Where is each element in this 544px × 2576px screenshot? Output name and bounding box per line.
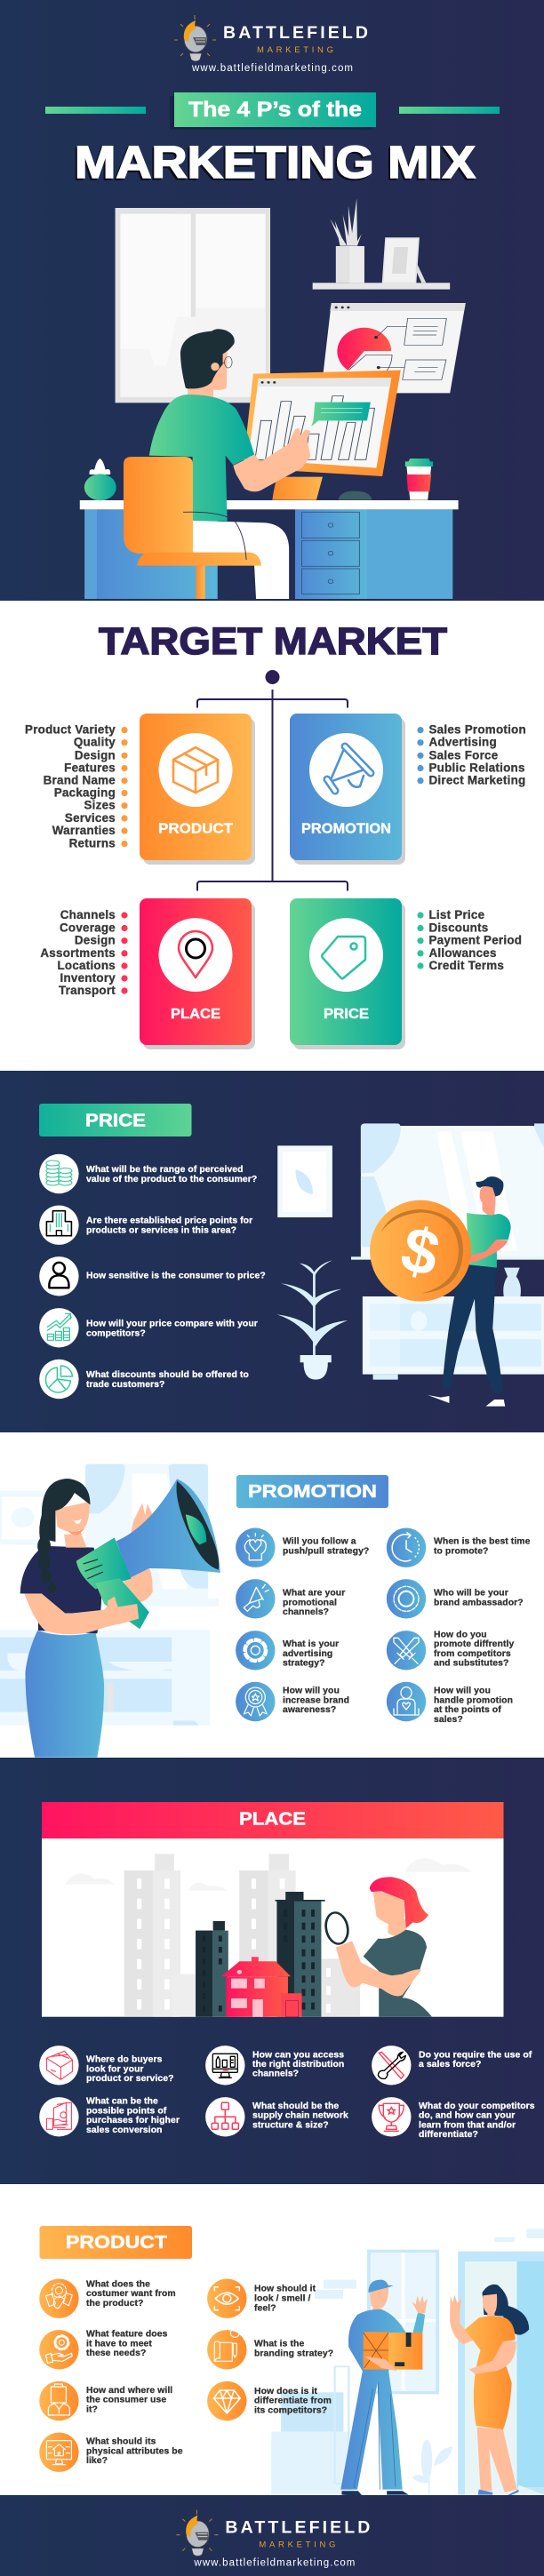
icon: award badge [244, 1687, 267, 1716]
icon: blueprint with pencil [214, 2328, 239, 2361]
list: place attributes: Coverage [60, 921, 116, 935]
icon: head with heart [244, 1534, 266, 1560]
question: look smell feel: look / smell / [254, 2294, 311, 2304]
icon: clock [392, 1533, 419, 1561]
question: differentiate: How does is it [254, 2387, 317, 2397]
section: header background [0, 0, 544, 601]
icon: coins [46, 1160, 72, 1185]
logo: footer brand: www.battlefieldmarketing.com [193, 2558, 355, 2569]
question: awareness: How will you [283, 1686, 340, 1695]
icon: seal [394, 1586, 419, 1611]
question: channels: What are your [283, 1588, 345, 1598]
card: price [290, 898, 405, 1049]
list: promotion attributes: Sales Force [428, 748, 498, 762]
question: competitors do [372, 2097, 535, 2140]
question: buyers look: product or service? [86, 2074, 174, 2084]
monitor [243, 371, 401, 500]
question: sales force: Do you require the use of [419, 2050, 532, 2060]
question: physical attributes [39, 2433, 183, 2472]
logo: footer brand: MARKETING [259, 2540, 335, 2550]
question: perceived value: value of the product to the consumer? [86, 1175, 257, 1184]
question: buyers look: look for your [86, 2064, 144, 2074]
question: physical attributes: like? [86, 2456, 108, 2466]
question: best time: When is the best time [434, 1537, 531, 1547]
question: where use: How and where will [86, 2386, 172, 2396]
icon: eye focus [214, 2287, 239, 2310]
question: discounts [39, 1360, 249, 1399]
question: push/pull: push/pull strategy? [283, 1546, 369, 1556]
question: customer want: costumer want from [86, 2289, 176, 2299]
chair [124, 457, 261, 599]
question: differently: How do you [434, 1630, 487, 1639]
card: product [140, 714, 255, 865]
heading: product [39, 2226, 192, 2259]
question: differently: from competitors [434, 1649, 511, 1659]
card: product: PRODUCT [158, 821, 233, 837]
question: discounts: What discounts should be offered to [86, 1370, 249, 1380]
heading: price [39, 1104, 192, 1136]
question: branding: What is the [254, 2339, 304, 2349]
list: product attributes: Features [64, 761, 116, 775]
list: price attributes: Discounts [428, 921, 488, 935]
illustration: city and woman with magnifier [65, 1854, 471, 2017]
illustration: shelf with plant and frame [313, 198, 450, 290]
grey buildings [124, 1854, 360, 2017]
list: product attributes: Design [75, 748, 116, 762]
question: points of purchase: sales conversion [86, 2125, 163, 2135]
sideboard [363, 1268, 544, 1380]
icon: handshake with people [45, 2284, 72, 2309]
section: target market heading: TARGET MARKET [99, 620, 447, 663]
card: price: PRICE [324, 1007, 369, 1022]
icon: price tag [322, 937, 365, 978]
question: buyers look [39, 2046, 174, 2085]
question: branding [207, 2328, 333, 2369]
question: supply chain: What should be the [252, 2101, 339, 2111]
icon: box [173, 747, 218, 793]
heading: price: PRICE [85, 1111, 146, 1130]
icon: monitor with tools [212, 2054, 237, 2078]
heading: promotion: PROMOTION [248, 1482, 377, 1502]
icon: parcel [46, 2051, 72, 2079]
list: product attributes: Quality [74, 736, 116, 749]
card: place [140, 898, 255, 1049]
question: competitors do: What do your competitors [419, 2101, 535, 2111]
illustration: man with coin [276, 1123, 544, 1407]
question: advertising: What is your [283, 1639, 339, 1649]
question: price points: products or services in this area? [86, 1226, 236, 1236]
dark buildings [196, 1892, 325, 2017]
question: sales force: a sales force? [419, 2060, 481, 2070]
illustration: office scene [80, 208, 466, 599]
panel: place banner [42, 1802, 503, 2017]
question: push/pull: Will you follow a [283, 1537, 356, 1547]
illustration: woman with megaphone [0, 1464, 220, 1758]
question: distribution: the right distribution [252, 2060, 344, 2070]
question: branding: branding stratey? [254, 2349, 333, 2358]
icon: dollar sign on coin: $ [395, 1213, 446, 1291]
icon: diamond [213, 2390, 240, 2413]
heading: promotion [236, 1475, 388, 1508]
question: supply chain [205, 2097, 348, 2136]
icon: person with bag [48, 2384, 69, 2415]
list: product attributes: Returns [69, 837, 116, 850]
question: points of purchase: possible points of [86, 2106, 167, 2116]
icon: pie chart [45, 1366, 72, 1392]
question: look smell feel: feel? [254, 2303, 276, 2313]
question: sensitivity: How sensitive is the consumer to price? [86, 1271, 266, 1281]
question: customer want: the product? [86, 2299, 143, 2309]
question: features: these needs? [86, 2349, 146, 2358]
list: product attributes: Brand Name [44, 774, 116, 787]
question: points of sale: handle promotion [434, 1695, 513, 1705]
man [428, 1176, 511, 1407]
list: place attributes: Design [75, 934, 116, 947]
question: features [39, 2330, 168, 2369]
back browser panel [321, 303, 466, 393]
question: differently: promote diffrently [434, 1639, 514, 1649]
illustration: delivery scene [271, 2229, 544, 2499]
question: sales force [372, 2046, 532, 2085]
wall picture [277, 1145, 332, 1217]
window and curtains [351, 1123, 544, 1260]
question: competitors [39, 1308, 258, 1348]
title: marketing mix: MARKETING MIX [73, 139, 474, 189]
icon: org chart [212, 2102, 238, 2129]
woman with magnifier [324, 1877, 432, 2017]
card: promotion: PROMOTION [301, 821, 391, 837]
list: product attributes: Packaging [54, 786, 116, 800]
icon: monitor house [46, 2441, 71, 2465]
icon: growth chart [47, 1313, 71, 1340]
question: best time: to promote? [434, 1546, 488, 1556]
question: advertising: advertising [283, 1649, 332, 1659]
question: look smell feel: How should it [254, 2285, 316, 2294]
list: product attributes: Services [65, 811, 116, 825]
window [116, 208, 270, 403]
list: product attributes: Sizes [84, 799, 116, 812]
logo: footer brand [176, 2510, 370, 2569]
list: product attributes [25, 723, 128, 850]
background room [0, 1464, 219, 1726]
question: where use: the consumer use [86, 2396, 166, 2405]
question: physical attributes: physical attributes be [86, 2446, 183, 2456]
list: promotion attributes: Sales Promotion [428, 723, 526, 737]
list: place attributes: Locations [57, 959, 116, 972]
icon: crossed swords [394, 1638, 419, 1663]
question: channels: channels? [283, 1607, 329, 1617]
question: discounts: trade customers? [86, 1380, 164, 1390]
list: price attributes [417, 908, 522, 972]
list: place attributes: Channels [60, 908, 116, 921]
icon: hand with money [46, 2102, 71, 2129]
clouds [65, 1858, 471, 1891]
question: buyers look: Where do buyers [86, 2055, 163, 2065]
woman at door [450, 2285, 529, 2499]
question: awareness [236, 1682, 349, 1721]
list: price attributes: Allowances [428, 946, 497, 960]
question: competitors do: differentiate? [419, 2130, 478, 2140]
list: promotion attributes: Direct Marketing [428, 774, 525, 787]
question: distribution: channels? [252, 2070, 299, 2079]
house [221, 1957, 302, 2017]
question: points of purchase: What can be the [86, 2097, 158, 2107]
card: promotion [290, 714, 405, 865]
question: differently [387, 1630, 514, 1671]
question: where use: it? [86, 2405, 98, 2414]
question: points of sale [387, 1682, 513, 1725]
question: price points: Are there established price points for [86, 1216, 252, 1226]
list: promotion attributes: Public Relations [428, 761, 525, 775]
list: price attributes: List Price [428, 908, 484, 921]
question: distribution [205, 2046, 344, 2085]
question: channels [236, 1579, 345, 1619]
potted plant [276, 1260, 348, 1380]
list: product attributes: Product Variety [25, 723, 116, 737]
question: points of purchase: purchases for higher [86, 2116, 180, 2125]
question: look smell feel [207, 2278, 316, 2318]
title: marketing mix: MARKETING MIX [75, 137, 476, 187]
question: push/pull [236, 1528, 369, 1567]
list: promotion attributes: Advertising [428, 736, 497, 749]
question: competitors do: learn from that and/or [419, 2120, 516, 2130]
desk [80, 500, 459, 599]
question: awareness: increase brand [283, 1695, 349, 1705]
icon: gear [244, 1639, 266, 1661]
question: differently: and substitutes? [434, 1659, 508, 1669]
icon: buildings [46, 1211, 71, 1236]
list: product attributes: Warranties [52, 824, 116, 837]
question: differentiate [207, 2381, 332, 2420]
question: features: it have to meet [86, 2339, 152, 2349]
question: advertising [236, 1631, 339, 1671]
question: perceived value: What will be the range of perceived [86, 1165, 244, 1175]
question: awareness: awareness? [283, 1705, 336, 1715]
megaphone [76, 1479, 220, 1629]
list: promotion attributes [417, 723, 526, 787]
question: competitors: competitors? [86, 1328, 146, 1338]
list: place attributes [40, 908, 128, 997]
connector tree [197, 670, 348, 890]
question: where use [39, 2381, 172, 2420]
logo: top brand: BATTLEFIELD [223, 23, 368, 43]
logo: top brand: MARKETING [257, 45, 333, 55]
question: perceived value [39, 1154, 257, 1193]
heading: product: PRODUCT [66, 2233, 167, 2253]
question: ambassador: Who will be your [434, 1588, 508, 1598]
question: competitors do: do, and how can your [419, 2111, 515, 2121]
icon: location pin [179, 931, 212, 977]
title badge: The 4 P’s of the [188, 98, 362, 122]
question: distribution: How can you access [252, 2050, 344, 2060]
list: price attributes: Credit Terms [428, 959, 504, 972]
question: ambassador [387, 1579, 524, 1619]
title badge [170, 92, 376, 130]
icon: crossed tools [378, 2052, 405, 2078]
icon: megaphone [244, 1584, 268, 1611]
question: customer want: What does the [86, 2279, 150, 2289]
panel: place banner: PLACE [239, 1810, 306, 1830]
person at desk [149, 329, 310, 599]
logo: top brand: www.battlefieldmarketing.com [191, 63, 353, 74]
question: differentiate: differentiate from [254, 2397, 332, 2406]
question: differentiate: its competitors? [254, 2406, 327, 2416]
woman [20, 1479, 153, 1758]
icon: hand and gear [45, 2336, 72, 2363]
question: points of purchase [39, 2097, 180, 2136]
coin [370, 1200, 471, 1302]
delivery man [340, 2280, 428, 2496]
question: features: What feature does [86, 2330, 168, 2340]
question: points of sale: sales? [434, 1715, 463, 1725]
question: best time [387, 1528, 531, 1567]
icon: person [49, 1263, 68, 1288]
question: supply chain: structure & size? [252, 2120, 329, 2130]
logo: footer brand: BATTLEFIELD [225, 2518, 370, 2538]
icon: megaphone [327, 746, 371, 791]
icon: person with heart [394, 1687, 419, 1715]
list: place attributes: Assortments [40, 946, 116, 960]
section: footer background [0, 2495, 544, 2576]
logo: top brand [174, 15, 368, 74]
icon: trophy [379, 2103, 404, 2131]
background house [271, 2229, 544, 2495]
desk items [84, 459, 433, 500]
question: advertising: strategy? [283, 1659, 325, 1669]
list: place attributes: Inventory [60, 971, 116, 985]
question: customer want [39, 2278, 176, 2318]
decorative title bars [45, 107, 500, 114]
question: ambassador: brand ambassador? [434, 1598, 524, 1607]
question: points of sale: How will you [434, 1686, 491, 1695]
list: price attributes: Payment Period [428, 934, 522, 947]
question: supply chain: supply chain network [252, 2111, 348, 2121]
card: place: PLACE [171, 1007, 220, 1022]
question: channels: promotional [283, 1598, 337, 1607]
question: competitors: How will your price compare with your [86, 1319, 258, 1328]
question: sensitivity [39, 1256, 266, 1296]
section: place background [0, 1758, 544, 2184]
question: price points [39, 1205, 252, 1245]
question: points of sale: at the points of [434, 1705, 501, 1715]
list: place attributes: Transport [59, 984, 116, 997]
section: price background [0, 1071, 544, 1432]
question: physical attributes: What should its [86, 2437, 156, 2447]
